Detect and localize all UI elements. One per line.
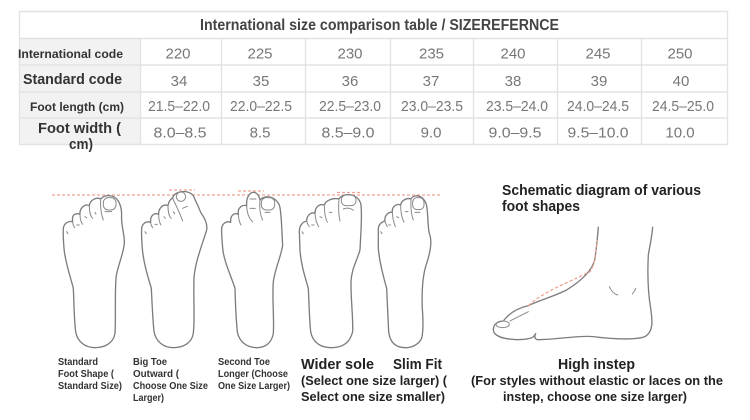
caption: big toe outward: Outward ( — [133, 369, 180, 380]
row values: international code: 235 — [419, 46, 444, 62]
icon: high instep side view foot — [493, 227, 653, 340]
row values: foot width: 9.0 — [421, 124, 441, 142]
row values: standard code: 39 — [591, 73, 607, 90]
row values: standard code: 38 — [505, 73, 521, 90]
caption: high instep: instep, choose one size larger) — [503, 389, 687, 404]
row values: standard code: 37 — [423, 73, 439, 90]
row values: foot length: 23.5–24.0 — [486, 98, 548, 115]
row label: foot width: Foot width ( — [38, 120, 121, 137]
row label: standard code: Standard code — [23, 71, 122, 88]
caption: wider sole and slim fit: Select one size smaller) — [301, 389, 445, 404]
row values: standard code: 35 — [253, 73, 269, 90]
caption: standard foot shape: Standard — [58, 357, 98, 368]
caption: big toe outward: Choose One Size — [133, 381, 208, 392]
row label: foot width: cm) — [69, 136, 93, 153]
caption: wider sole and slim fit: Wider sole — [301, 356, 374, 373]
row label: foot length: Foot length (cm) — [30, 100, 124, 114]
caption: wider sole and slim fit — [301, 356, 448, 404]
caption: high instep: High instep — [558, 356, 635, 373]
row values: foot length — [148, 98, 714, 115]
caption: high instep: (For styles without elastic or laces on the — [471, 373, 723, 388]
icon: standard foot shape — [63, 196, 124, 348]
row values: foot length: 22.5–23.0 — [319, 98, 381, 115]
caption: big toe outward: Larger) — [133, 393, 164, 404]
row values: foot length: 24.0–24.5 — [567, 98, 629, 115]
row values: foot width: 8.0–8.5 — [154, 124, 206, 142]
row values: foot width — [154, 124, 695, 142]
row values: standard code — [171, 73, 689, 90]
caption: big toe outward: Big Toe — [133, 357, 167, 368]
row values: foot width: 9.0–9.5 — [488, 124, 542, 142]
row label: international code: International code — [18, 47, 123, 61]
row values: international code: 240 — [500, 46, 526, 62]
red dashed toe reference lines — [52, 190, 440, 195]
caption: second toe longer: One Size Larger) — [218, 381, 290, 392]
row values: foot width: 8.5 — [250, 124, 270, 142]
size comparison table — [18, 12, 728, 153]
row values: international code — [165, 46, 693, 62]
caption: standard foot shape: Standard Size) — [58, 381, 122, 392]
row values: foot width: 10.0 — [665, 124, 695, 142]
icon: second toe longer foot — [222, 192, 283, 348]
caption: second toe longer: Longer (Choose — [218, 369, 288, 380]
caption: standard foot shape: Foot Shape ( — [58, 369, 115, 380]
row values: foot width: 9.5–10.0 — [568, 124, 628, 142]
row values: standard code: 40 — [673, 73, 689, 90]
heading: schematic diagram: foot shapes — [502, 198, 580, 215]
table title: International size comparison table / SIZEREFERNCE — [200, 17, 559, 34]
row values: international code: 245 — [585, 46, 611, 62]
row values: international code: 225 — [247, 46, 273, 62]
heading: schematic diagram: Schematic diagram of various — [502, 182, 701, 199]
row values: foot width: 8.5–9.0 — [322, 124, 374, 142]
caption: wider sole and slim fit: (Select one size larger) ( — [301, 373, 448, 388]
caption: second toe longer: Second Toe — [218, 357, 270, 368]
caption: wider sole and slim fit: Slim Fit — [393, 356, 442, 373]
row values: foot length: 23.0–23.5 — [401, 98, 463, 115]
row values: foot length: 24.5–25.0 — [652, 98, 714, 115]
row values: standard code: 34 — [171, 73, 187, 90]
row values: international code: 250 — [667, 46, 693, 62]
caption: high instep — [471, 356, 723, 404]
row values: international code: 230 — [337, 46, 363, 62]
row values: foot length: 22.0–22.5 — [230, 98, 292, 115]
icon: big toe outward foot — [142, 192, 207, 348]
row values: standard code: 36 — [342, 73, 358, 90]
row values: international code: 220 — [165, 46, 191, 62]
icon: slim fit foot — [378, 196, 431, 348]
icon: wider sole foot — [299, 195, 362, 348]
row values: foot length: 21.5–22.0 — [148, 98, 210, 115]
